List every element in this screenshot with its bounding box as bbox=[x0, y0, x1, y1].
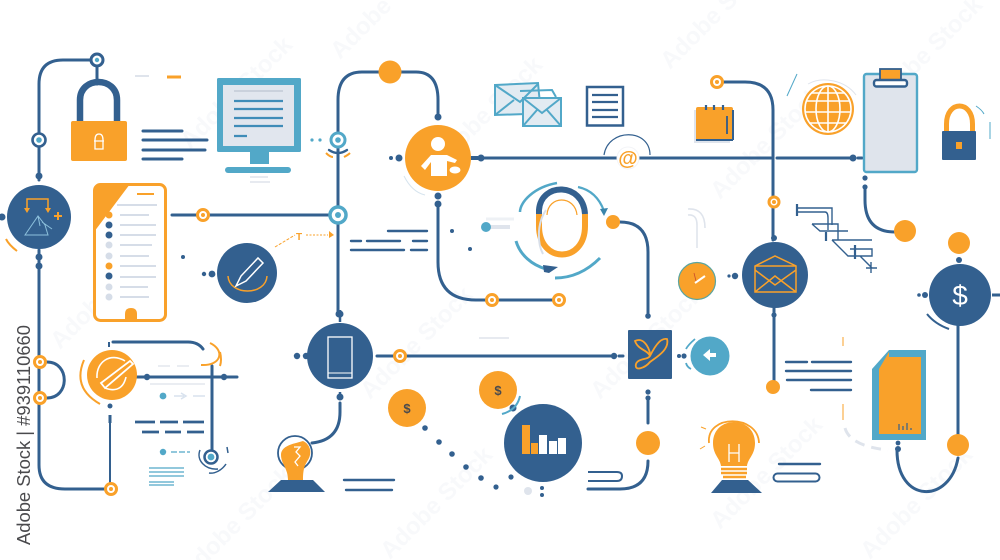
icon: envelopes bbox=[495, 83, 561, 126]
text lines: pill bbox=[774, 464, 820, 482]
icon: brand square bbox=[628, 301, 672, 379]
text lines: bulb bbox=[344, 480, 394, 490]
icon: document with chart bbox=[872, 350, 926, 440]
bar chart circle bbox=[504, 404, 582, 482]
icon: pencil circle bbox=[217, 243, 277, 303]
icon: light bulb with dollar bbox=[268, 436, 325, 492]
coin: bottom: $ bbox=[403, 401, 411, 416]
watermark pattern: Adobe Stock bbox=[425, 51, 548, 174]
icon: envelope circle bbox=[742, 242, 808, 308]
panel: checklist phone bbox=[94, 184, 166, 320]
connector notes bbox=[135, 366, 205, 485]
coin: top: $ bbox=[494, 383, 502, 398]
icon: dollar circle: $ bbox=[952, 280, 968, 311]
text lines: right bbox=[786, 337, 888, 450]
orange nodes bbox=[34, 76, 779, 494]
accent marks bbox=[135, 76, 181, 77]
watermark pattern: Adobe Stock bbox=[45, 231, 168, 354]
icon: idea bulb bbox=[700, 421, 762, 493]
icon: dollar circle bbox=[927, 264, 1000, 329]
watermark pattern: Adobe Stock bbox=[705, 411, 828, 534]
paperclip lines bbox=[588, 472, 622, 481]
connector lines bbox=[39, 60, 958, 492]
thin vertical connector bbox=[109, 418, 111, 484]
center padlock loop bbox=[481, 183, 608, 278]
icon: orange padlock bbox=[71, 82, 127, 161]
circuit glyphs bbox=[796, 204, 877, 273]
icon: right padlock bbox=[942, 106, 990, 160]
network circle: diagram icon bbox=[6, 185, 71, 251]
watermark pattern: Adobe Stock bbox=[355, 281, 478, 404]
icon: clock bbox=[678, 209, 716, 300]
ring node with signal bbox=[199, 447, 228, 473]
dashed arrow with T: T bbox=[296, 232, 302, 243]
icon: monitor bbox=[217, 78, 301, 182]
ring nodes bbox=[32, 54, 350, 223]
small nodes and dots bbox=[0, 114, 962, 497]
coin: bottom bbox=[388, 389, 426, 427]
dashed arrow with T bbox=[275, 231, 334, 247]
icon: teal back arrow bbox=[686, 336, 730, 376]
watermark pattern: Adobe Stock bbox=[585, 281, 708, 404]
icon: at-sign node bbox=[604, 135, 650, 170]
text lines: centre left bbox=[351, 231, 427, 250]
icon: globe bbox=[787, 74, 856, 135]
watermark pattern: Adobe Stock bbox=[175, 31, 298, 154]
icon: person circle bbox=[404, 125, 478, 195]
icon: phone circle bbox=[307, 310, 373, 400]
accent line bbox=[479, 337, 509, 339]
text lines: padlock bbox=[143, 131, 207, 159]
side label: Adobe Stock | #939110660 bbox=[14, 325, 34, 545]
icon: at-sign node: @ bbox=[618, 148, 638, 170]
watermark pattern: Adobe Stock bbox=[705, 81, 828, 204]
icon: pencil orange circle bbox=[80, 343, 221, 404]
coin: top bbox=[479, 371, 520, 414]
icon: notebook bbox=[694, 105, 734, 143]
icon: clipboard bbox=[864, 69, 917, 172]
icon: document lines bbox=[587, 87, 623, 126]
